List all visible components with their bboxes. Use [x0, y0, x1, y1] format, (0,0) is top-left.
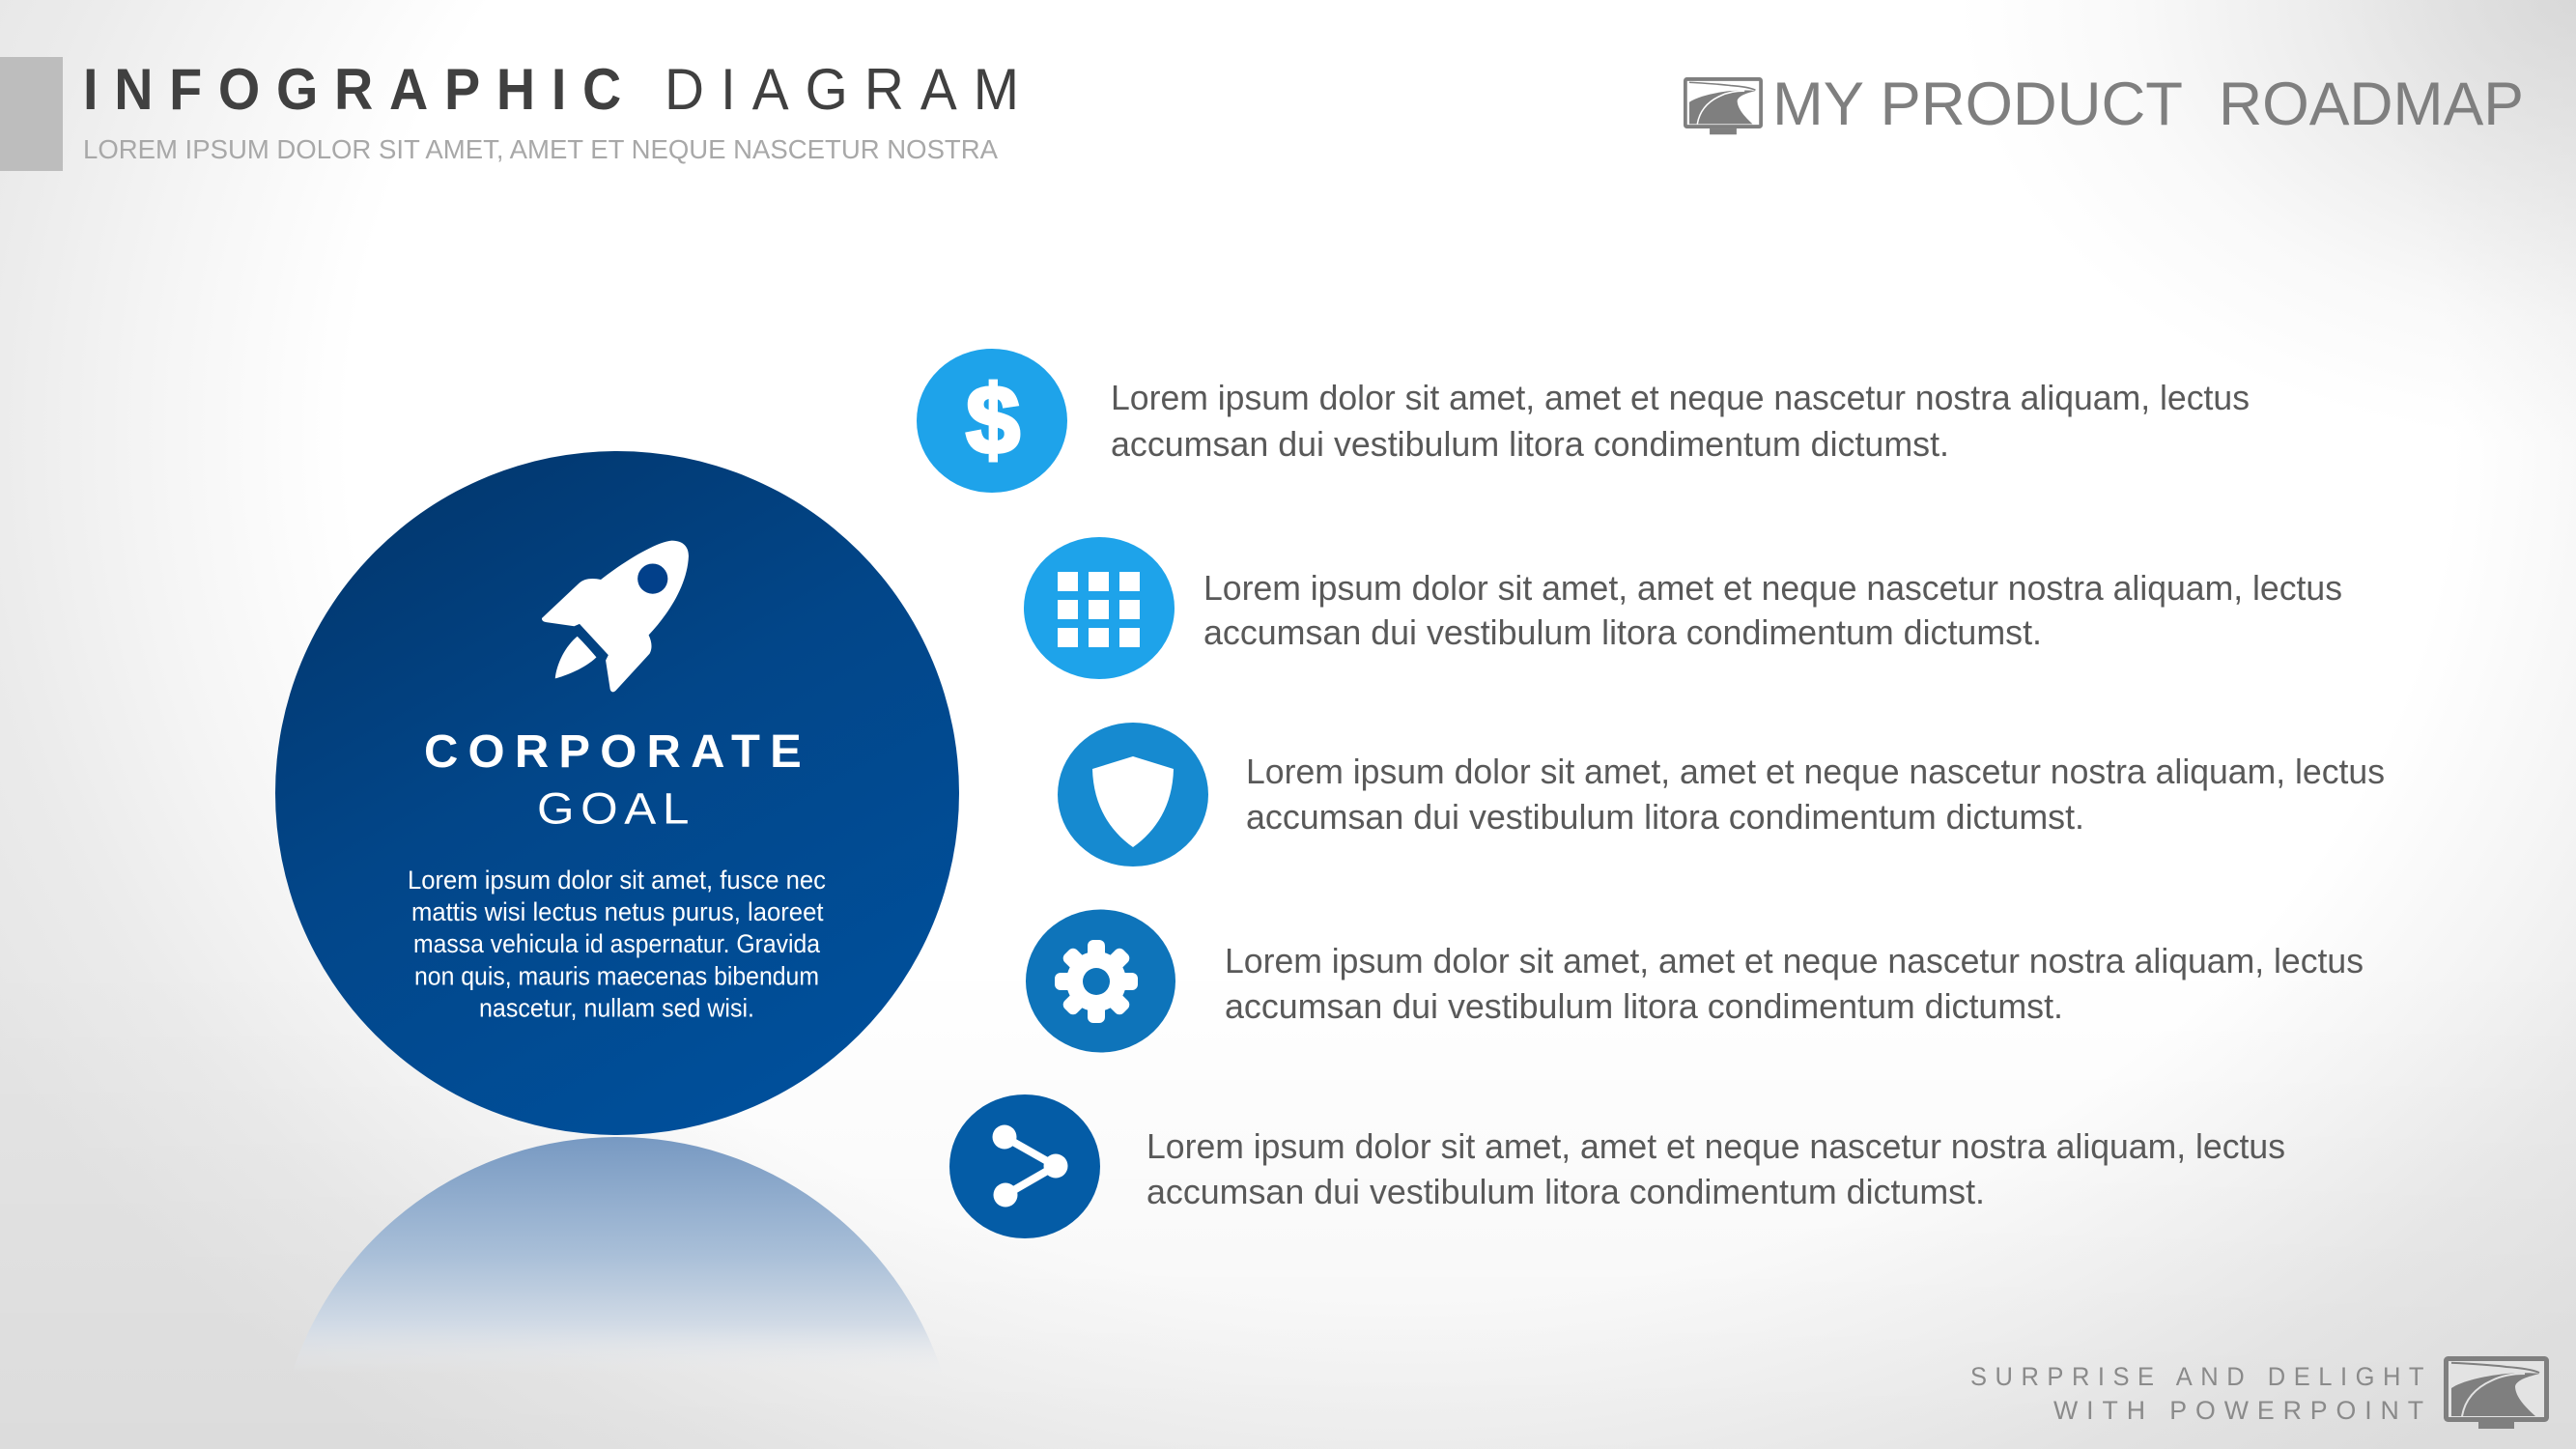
title	[83, 57, 1035, 122]
goal description: non quis, mauris maecenas bibendum	[414, 962, 819, 991]
icon: dollar	[917, 349, 1067, 493]
header accent block	[0, 57, 63, 171]
panel: corporate goal circle	[275, 451, 959, 1135]
reflection of main circle	[292, 1137, 943, 1374]
item 4: gear	[1026, 910, 2364, 1053]
goal description: mattis wisi lectus netus purus, laoreet	[411, 897, 824, 926]
text block 3: Lorem ipsum dolor sit amet, amet et neque nascetur nostra aliquam, lectus	[1246, 752, 2385, 791]
title: INFOGRAPHIC	[83, 57, 637, 122]
icon: grid	[1024, 537, 1175, 679]
text block 5: accumsan dui vestibulum litora condimentum dictumst.	[1146, 1172, 1985, 1211]
icon: shield	[1058, 723, 1208, 867]
icon: share	[949, 1094, 1100, 1238]
text block 1: accumsan dui vestibulum litora condimentum dictumst.	[1111, 424, 1949, 464]
item 5: share	[949, 1094, 2285, 1238]
icon: rocket	[542, 541, 689, 692]
text block 4	[1225, 941, 2364, 1026]
text block 1: Lorem ipsum dolor sit amet, amet et neque nascetur nostra aliquam, lectus	[1111, 378, 2250, 417]
text block 2: accumsan dui vestibulum litora condimentum dictumst.	[1203, 612, 2042, 652]
goal description: Lorem ipsum dolor sit amet, fusce nec	[408, 866, 826, 895]
footer tagline	[1970, 1362, 2432, 1425]
text block 4: Lorem ipsum dolor sit amet, amet et neque nascetur nostra aliquam, lectus	[1225, 941, 2364, 980]
text block 4: accumsan dui vestibulum litora condimentum dictumst.	[1225, 986, 2063, 1026]
text block 2: Lorem ipsum dolor sit amet, amet et neque nascetur nostra aliquam, lectus	[1203, 568, 2342, 608]
title: DIAGRAM	[665, 57, 1035, 122]
item 3: shield	[1058, 723, 2385, 867]
text block 3	[1246, 752, 2385, 837]
brand heading: MY PRODUCT	[1772, 71, 2183, 138]
footer tagline: SURPRISE AND DELIGHT	[1970, 1362, 2432, 1391]
item 2: grid	[1024, 537, 2342, 679]
footer tagline: WITH POWERPOINT	[2053, 1396, 2432, 1425]
brand heading: ROADMAP	[2219, 71, 2524, 138]
icon: gear	[1026, 910, 1175, 1053]
heading: goal: GOAL	[537, 784, 695, 833]
icon: roadmap logo footer	[2446, 1358, 2546, 1429]
heading: corporate: CORPORATE	[424, 726, 811, 778]
brand heading	[1772, 71, 2524, 138]
text block 2	[1203, 568, 2342, 652]
subtitle: LOREM IPSUM DOLOR SIT AMET, AMET ET NEQUE NASCETUR NOSTRA	[83, 134, 998, 164]
text block 5: Lorem ipsum dolor sit amet, amet et neque nascetur nostra aliquam, lectus	[1146, 1126, 2285, 1166]
icon: roadmap logo top	[1685, 79, 1761, 134]
text block 3: accumsan dui vestibulum litora condimentum dictumst.	[1246, 797, 2084, 837]
text block 5	[1146, 1126, 2285, 1211]
goal description: massa vehicula id aspernatur. Gravida	[413, 929, 821, 958]
text block 1	[1111, 378, 2250, 464]
goal description: nascetur, nullam sed wisi.	[479, 994, 754, 1023]
goal description	[408, 866, 826, 1023]
icon: dollar: $	[966, 366, 1020, 474]
item 1: dollar	[917, 349, 2250, 493]
